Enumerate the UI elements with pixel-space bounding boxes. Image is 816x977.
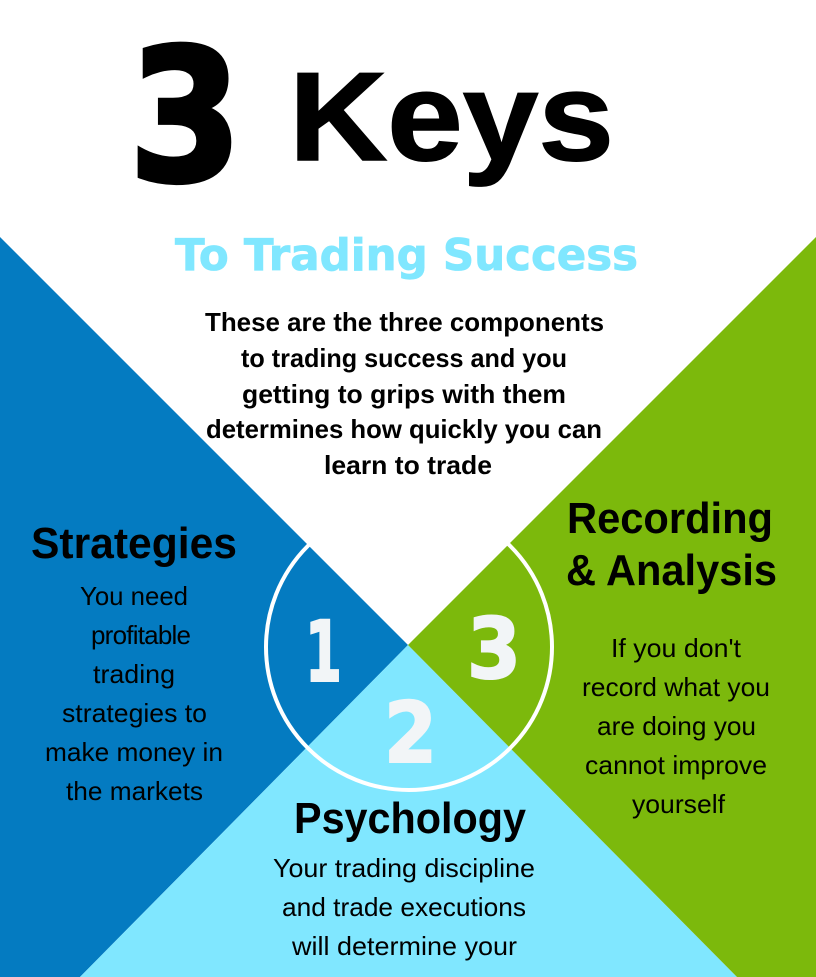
panel: psychology background xyxy=(80,645,737,977)
number 2: 2 xyxy=(384,684,437,782)
text: recording and analysis body xyxy=(582,633,770,819)
heading: recording and analysis xyxy=(566,494,777,595)
text: recording and analysis body: cannot improve xyxy=(585,750,767,780)
text: strategies body: strategies to xyxy=(62,698,207,728)
intro text: These are the three components xyxy=(205,307,604,337)
intro text: to trading success and you xyxy=(241,343,567,373)
text: strategies body: the markets xyxy=(66,776,203,806)
panel: recording and analysis background xyxy=(408,237,816,977)
text: recording and analysis body: are doing you xyxy=(597,711,756,741)
number 3: 3 xyxy=(467,600,521,698)
intro text: getting to grips with them xyxy=(242,379,566,409)
heading: recording and analysis: & Analysis xyxy=(566,546,777,595)
ring around numbers xyxy=(266,504,552,790)
text: recording and analysis body: record what you xyxy=(582,672,770,702)
heading: strategies: Strategies xyxy=(31,519,237,568)
text: recording and analysis body: If you don't xyxy=(611,633,742,663)
text: strategies body: You need xyxy=(80,581,188,611)
intro text: learn to trade xyxy=(324,450,492,480)
text: psychology body: and trade executions xyxy=(282,892,526,922)
text: psychology body xyxy=(273,853,535,961)
title word Keys: Keys xyxy=(289,46,614,187)
panel: strategies background xyxy=(0,237,408,977)
number 1: 1 xyxy=(305,603,342,701)
subtitle: To Trading Success xyxy=(175,230,638,281)
title numeral 3: 3 xyxy=(129,11,242,224)
text: psychology body: Your trading discipline xyxy=(273,853,535,883)
heading: recording and analysis: Recording xyxy=(567,494,773,543)
heading: psychology: Psychology xyxy=(294,794,526,843)
text: psychology body: will determine your xyxy=(291,931,517,961)
title xyxy=(129,11,614,224)
text: strategies body xyxy=(45,581,223,806)
text: strategies body: trading xyxy=(93,659,175,689)
intro text: determines how quickly you can xyxy=(206,414,602,444)
text: recording and analysis body: yourself xyxy=(632,789,726,819)
intro text xyxy=(205,307,604,480)
text: strategies body: profitable xyxy=(91,620,191,650)
text: strategies body: make money in xyxy=(45,737,223,767)
